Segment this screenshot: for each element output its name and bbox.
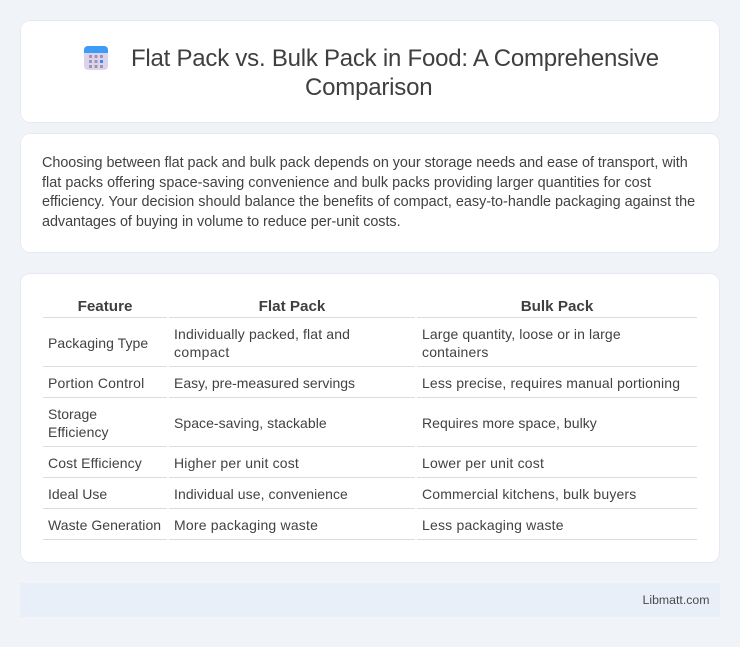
intro paragraph: advantages of buying in volume to reduce per-unit costs. (42, 214, 401, 230)
intro paragraph: efficiency. Your decision should balance the benefits of compact, easy-to-handle packaging against the (42, 194, 695, 210)
row: ideal use: Individual use, convenience (174, 486, 348, 502)
row: cost efficiency: Higher per unit cost (174, 455, 299, 471)
row: packaging type: containers (422, 344, 489, 360)
row: packaging type: Individually packed, flat and (174, 326, 350, 342)
row: waste generation (48, 517, 564, 533)
table header row: Flat Pack (259, 298, 325, 315)
row: storage efficiency (48, 406, 597, 440)
intro paragraph (42, 155, 695, 230)
row: cost efficiency (48, 455, 544, 471)
intro card (20, 133, 720, 253)
row: ideal use: Ideal Use (48, 486, 107, 502)
header card (20, 20, 720, 123)
footer credit: Libmatt.com (643, 593, 710, 607)
table header row: Feature (78, 298, 132, 315)
row: portion control: Portion Control (48, 375, 144, 391)
row: storage efficiency: Requires more space, bulky (422, 415, 597, 431)
intro paragraph: flat packs offering space-saving convenience and bulk packs providing larger quantities for cost (42, 174, 651, 190)
row: storage efficiency: Storage (48, 406, 97, 422)
footer bar (20, 583, 720, 617)
row: packaging type: Large quantity, loose or in large (422, 326, 621, 342)
intro paragraph: Choosing between flat pack and bulk pack depends on your storage needs and ease of transport, with (42, 155, 688, 171)
row: packaging type (48, 326, 621, 360)
title: Comparison (305, 74, 432, 101)
row: storage efficiency: Space-saving, stackable (174, 415, 327, 431)
title (131, 45, 659, 101)
table (43, 298, 697, 540)
row: ideal use: Commercial kitchens, bulk buyers (422, 486, 636, 502)
row: cost efficiency: Cost Efficiency (48, 455, 142, 471)
table header row: Bulk Pack (521, 298, 593, 315)
row: ideal use (48, 486, 636, 502)
row: portion control: Less precise, requires manual portioning (422, 375, 680, 391)
table header row (78, 298, 594, 315)
row: packaging type: Packaging Type (48, 335, 148, 351)
row: waste generation: Less packaging waste (422, 517, 564, 533)
title: Flat Pack vs. Bulk Pack in Food: A Comprehensive (131, 45, 659, 72)
comparison table card (20, 273, 720, 563)
row: waste generation: More packaging waste (174, 517, 318, 533)
icon: calendar grid (84, 46, 108, 70)
row: portion control (48, 375, 680, 391)
row: portion control: Easy, pre-measured servings (174, 375, 355, 391)
row: cost efficiency: Lower per unit cost (422, 455, 544, 471)
row: storage efficiency: Efficiency (48, 424, 109, 440)
row: waste generation: Waste Generation (48, 517, 161, 533)
row: packaging type: compact (174, 344, 230, 360)
